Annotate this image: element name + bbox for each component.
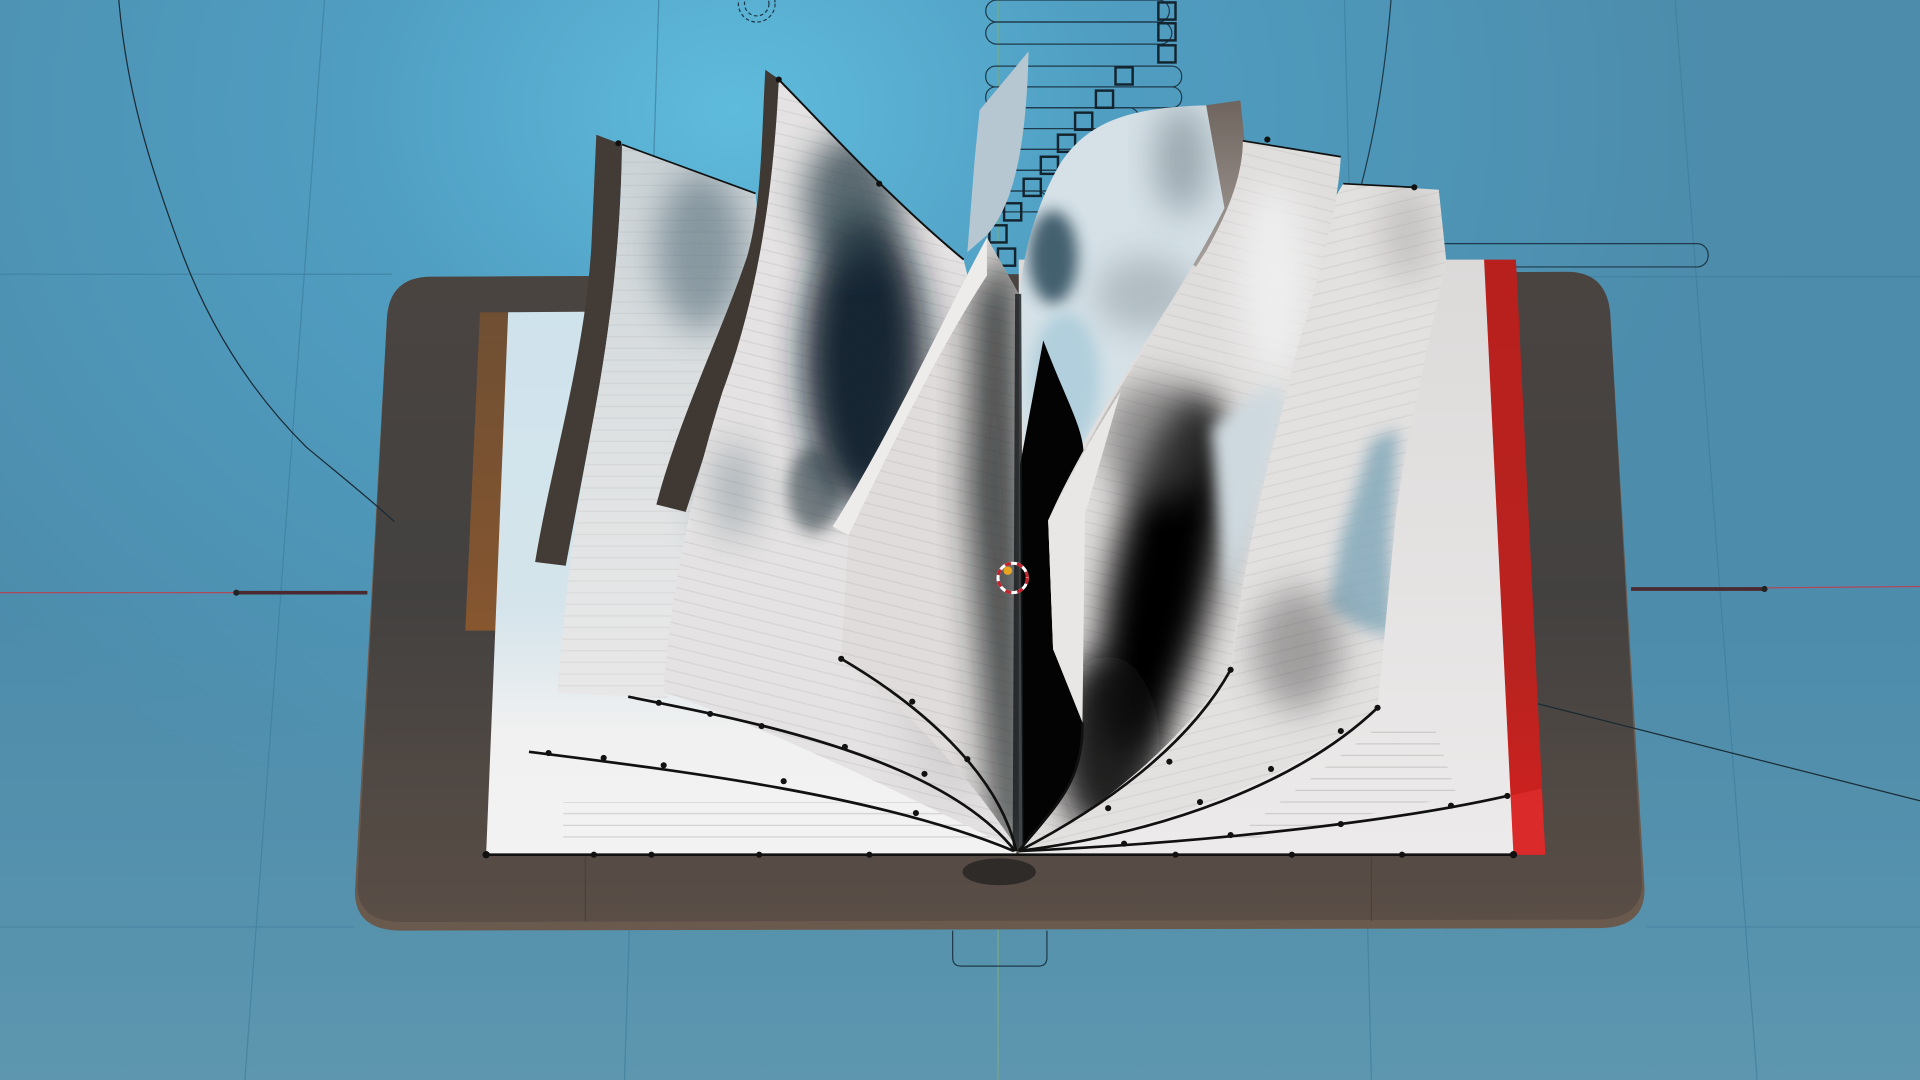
fan page 5: [1020, 105, 1224, 444]
fan page 2: [649, 73, 1029, 857]
fan page 3 tall sliver: [967, 51, 1029, 252]
fan page 7: [1022, 178, 1451, 863]
3D cursor: [998, 563, 1027, 593]
animation curve handles crossing the mat: [119, 0, 1920, 801]
y axis green line: [997, 0, 999, 1080]
flat left page: [486, 309, 1016, 855]
flat right page: [1019, 260, 1513, 855]
leather mat: [355, 272, 1645, 931]
control handles and timeline shapes behind the book: [738, 0, 1708, 966]
fan page 2 dark back: [656, 70, 781, 512]
fan page 1: [558, 145, 757, 698]
red right cover edge: [1482, 260, 1545, 855]
fan page 6: [1016, 135, 1347, 857]
fan page 1 dark back: [535, 135, 622, 566]
book clasp: [962, 858, 1036, 885]
spline control points: [482, 77, 1517, 858]
spine shadow strip: [1013, 294, 1024, 851]
spline curves along page bottoms: [486, 80, 1513, 855]
x axis red line: [0, 586, 1920, 596]
fan page 4: [832, 238, 1018, 849]
fan page 5 dark back: [1176, 100, 1247, 272]
central black shadow in gutter: [1020, 340, 1084, 847]
bone markers on timeline: [989, 2, 1176, 266]
brown left cover edge: [465, 312, 514, 631]
